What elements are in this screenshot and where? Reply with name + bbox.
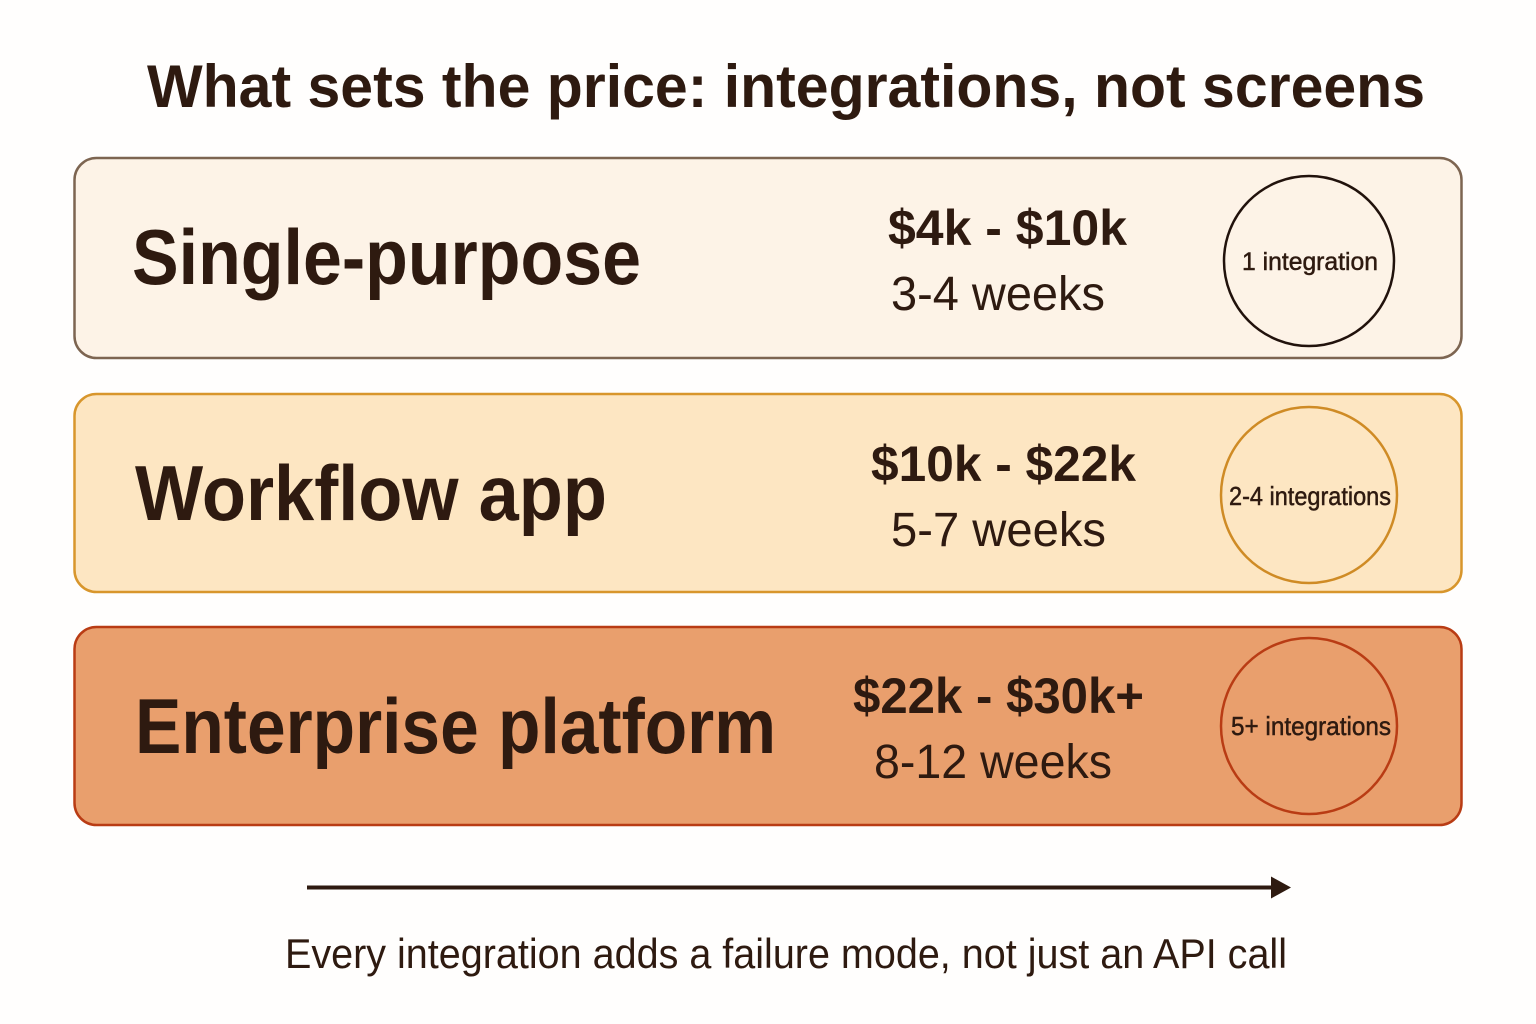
price and timeline: workflow app: 5-7 weeks [891, 504, 1106, 557]
integration badge: 2-4 integrations [1221, 407, 1397, 583]
panel: single-purpose tier [74, 158, 1462, 358]
panel: enterprise platform tier [74, 627, 1462, 825]
integration badge: 5+ integrations [1221, 638, 1397, 814]
price and timeline: enterprise platform: 8-12 weeks [874, 736, 1112, 789]
tier name: single-purpose: Single-purpose [132, 213, 641, 301]
integration badge: 1 integration: 1 integration [1242, 248, 1378, 276]
price and timeline: enterprise platform [853, 668, 1144, 789]
price and timeline: workflow app: $10k - $22k [871, 436, 1136, 492]
title: What sets the price: integrations, not screens [147, 53, 1425, 120]
tier name: enterprise platform: Enterprise platform [135, 682, 776, 770]
integration badge: 5+ integrations: 5+ integrations [1231, 711, 1391, 741]
panel: workflow app tier [74, 394, 1462, 592]
integration badge: 1 integration [1224, 176, 1394, 346]
price and timeline: enterprise platform: $22k - $30k+ [853, 668, 1144, 724]
price and timeline: single-purpose: $4k - $10k [888, 200, 1127, 256]
price and timeline: workflow app [871, 436, 1136, 557]
price and timeline: single-purpose [888, 200, 1127, 321]
tier name: workflow app: Workflow app [135, 449, 607, 537]
integration badge: 2-4 integrations: 2-4 integrations [1229, 481, 1391, 511]
arrow [307, 876, 1291, 898]
caption: Every integration adds a failure mode, not just an API call [285, 930, 1287, 977]
price and timeline: single-purpose: 3-4 weeks [891, 268, 1105, 321]
